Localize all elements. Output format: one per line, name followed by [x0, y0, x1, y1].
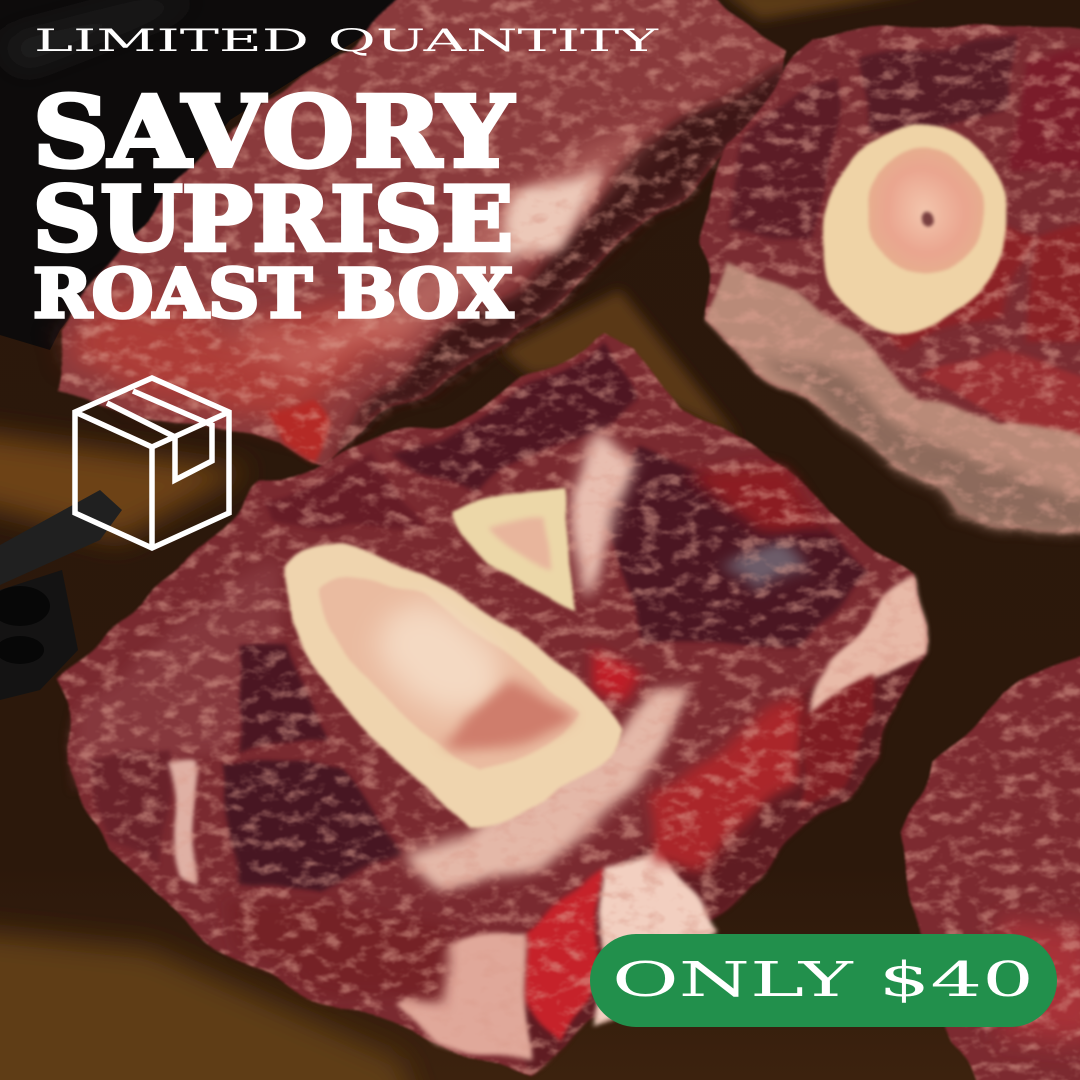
knife handle	[0, 490, 122, 700]
meat cut: top centre	[55, 0, 790, 460]
title line: suprise: SUPRISE	[33, 167, 513, 271]
meat cut: top right with bone	[698, 28, 1080, 535]
title line: roast box: ROAST BOX	[33, 254, 513, 333]
meat cut: main foreground	[60, 335, 925, 1075]
bone: top right	[792, 96, 1038, 360]
heading: limited quantity: LIMITED QUANTITY	[34, 23, 659, 59]
meat cut: bottom right	[900, 650, 1080, 1080]
bone: small upper	[452, 488, 573, 610]
icon: package box	[75, 378, 229, 548]
title line: savory: SAVORY	[33, 75, 515, 189]
title	[33, 75, 515, 333]
price text: ONLY $40	[612, 952, 1034, 1008]
bone: main	[285, 544, 622, 830]
price badge	[590, 934, 1057, 1027]
